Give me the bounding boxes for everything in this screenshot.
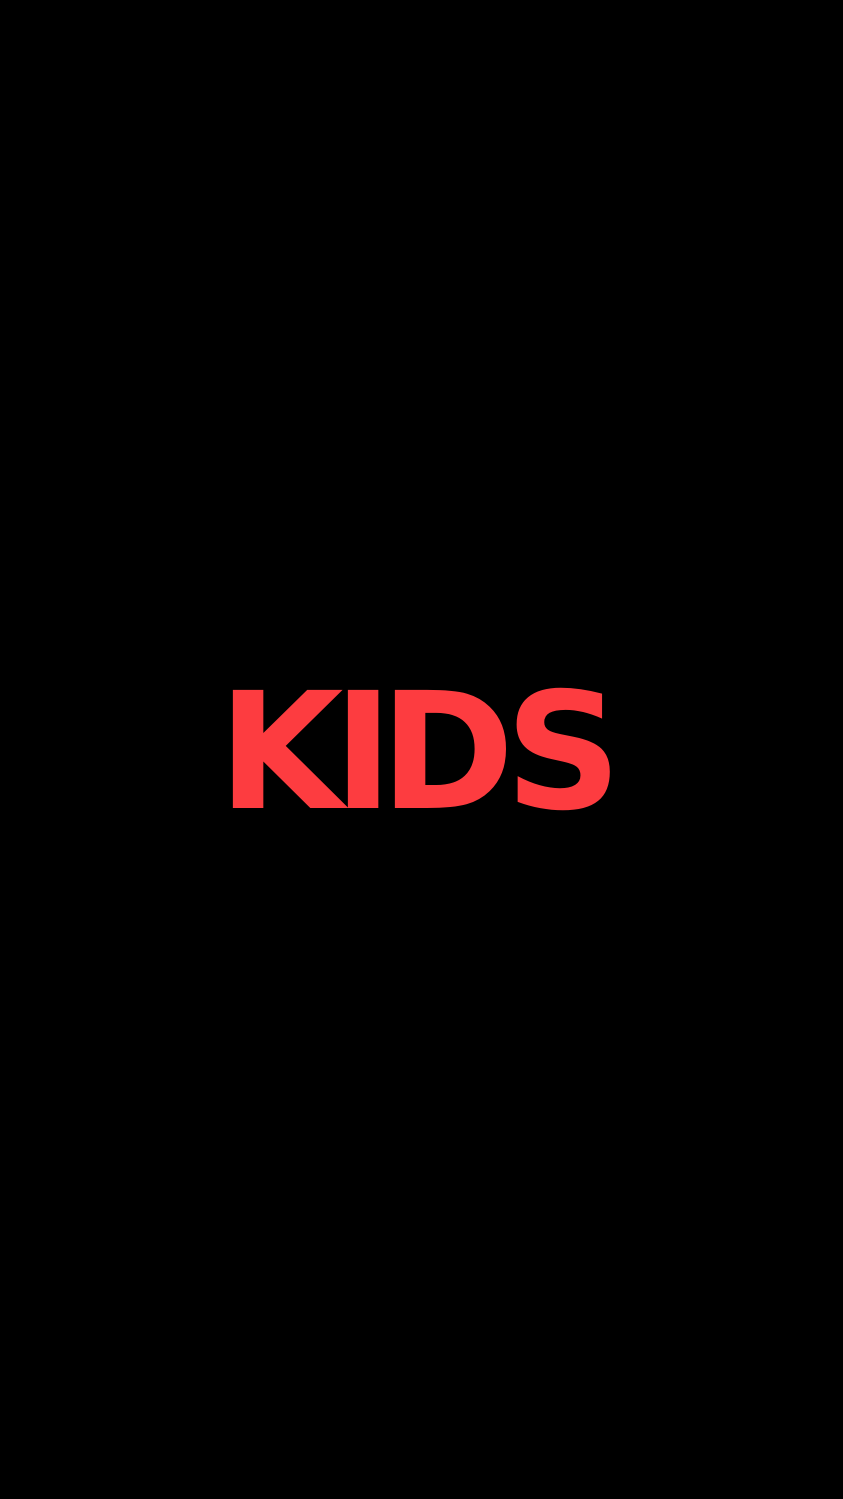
title: KIDS: KIDS — [218, 659, 622, 847]
